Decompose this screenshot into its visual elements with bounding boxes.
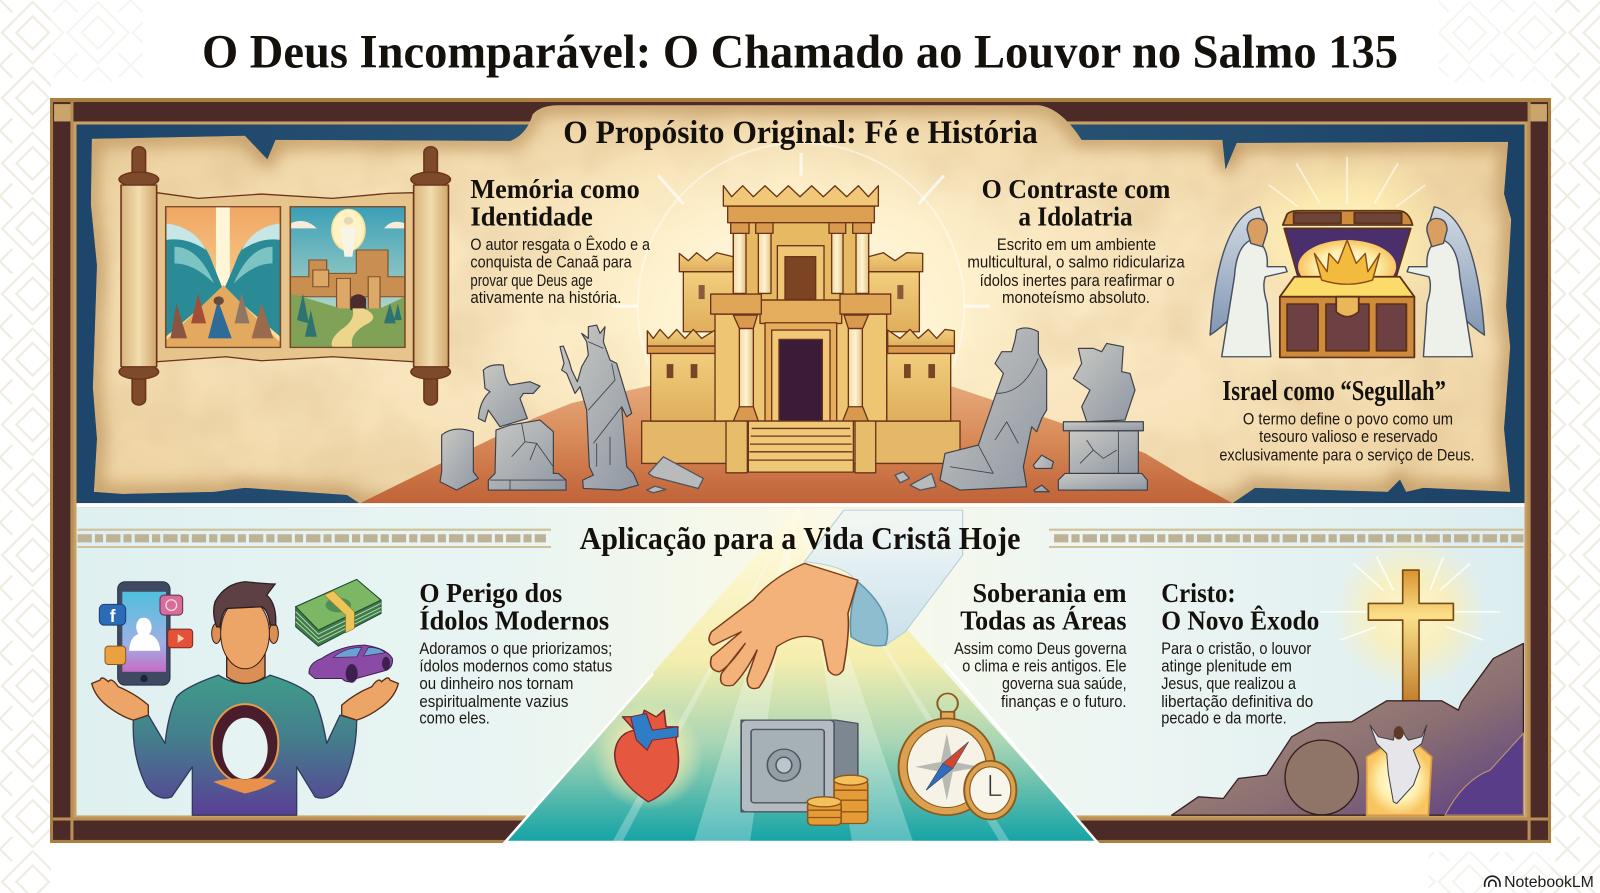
ornamental bands	[78, 530, 1523, 547]
base	[642, 421, 960, 463]
social icons	[99, 604, 126, 625]
rolled stone	[1285, 740, 1358, 815]
text block: Christ new exodus: O Novo Êxodo	[1161, 605, 1319, 636]
icon: Segullah chest and angels	[1210, 147, 1485, 357]
text block: contrast with idolatry: a Idolatria	[1018, 201, 1133, 232]
text block: Christ new exodus: libertação definitiva do	[1161, 692, 1313, 711]
scroll sheet	[157, 193, 414, 362]
rocky hill	[1172, 643, 1523, 815]
light background	[77, 503, 1524, 507]
text block: sovereignty	[954, 577, 1127, 711]
panel: application today	[77, 503, 1524, 842]
text block: Christ new exodus	[1161, 577, 1319, 728]
crown	[1314, 240, 1380, 284]
text block: contrast with idolatry: ídolos inertes para reafirmar o	[980, 271, 1174, 290]
crowned standing statue	[560, 325, 638, 490]
text block: modern idols: O Perigo dos	[419, 577, 563, 608]
text block: Segullah: tesouro valioso e reservado	[1259, 427, 1438, 446]
text block: contrast with idolatry	[967, 173, 1185, 307]
cross	[1368, 570, 1453, 702]
sunburst behind temple	[510, 112, 1092, 500]
parchment sheet	[82, 102, 1520, 505]
icon: divine hand	[709, 510, 963, 689]
head and neck	[227, 653, 265, 683]
rubble	[647, 457, 936, 493]
low wings	[647, 253, 954, 421]
text block: modern idols: Adoramos o que priorizamos;	[419, 639, 612, 658]
icon: person with empty heart and modern idols	[92, 579, 398, 815]
robed statue on rock	[940, 328, 1047, 490]
text block: memory: provar que Deus age	[470, 271, 593, 290]
text block: memory: O autor resgata o Êxodo e a	[470, 235, 651, 254]
text block: memory: conquista de Canaã para	[470, 252, 632, 271]
money stack	[296, 579, 381, 646]
lower sanctuary	[715, 314, 887, 421]
icon: cross and empty tomb	[1172, 537, 1523, 815]
text block: memory	[470, 173, 651, 307]
text block: modern idols: espiritualmente vazius	[419, 692, 568, 711]
upper sanctuary	[733, 222, 868, 300]
icon: torah scroll	[119, 147, 450, 405]
text block: sovereignty: Soberania em	[972, 577, 1127, 608]
icon: broken idols left	[440, 325, 638, 490]
stairs	[748, 421, 853, 472]
small rocks	[1033, 455, 1053, 492]
icon: safe and coins	[741, 720, 868, 825]
text block: memory: Identidade	[470, 201, 593, 232]
left angel	[1210, 207, 1287, 357]
risen Christ	[1370, 725, 1427, 803]
icon: broken idols right	[940, 328, 1147, 492]
scroll rollers	[119, 147, 450, 405]
icon: compass and watch	[899, 693, 1016, 819]
light pyramid	[505, 507, 1097, 842]
glow and rays	[1234, 147, 1460, 327]
panel: original purpose	[77, 102, 1524, 505]
section heading: Aplicação para a Vida Cristã Hoje	[580, 521, 1020, 556]
logo: NotebookLM: NotebookLM	[1504, 874, 1594, 891]
ground hill	[360, 367, 1233, 503]
icon: heart	[593, 703, 704, 810]
text block: memory: ativamente na história.	[470, 288, 621, 307]
text block: Segullah: O termo define o povo como um	[1243, 410, 1453, 429]
text block: Christ new exodus: Cristo:	[1161, 577, 1236, 608]
treasure chest	[1280, 211, 1414, 357]
text block: Segullah: Israel como “Segullah”	[1222, 376, 1446, 407]
right angel	[1407, 207, 1485, 357]
navy backdrop	[77, 125, 1524, 503]
phone	[118, 582, 170, 685]
text block: modern idols	[419, 577, 612, 728]
icon: golden temple	[642, 186, 960, 493]
text block: contrast with idolatry: monoteísmo absoluto.	[1002, 288, 1150, 307]
broken bust	[1073, 343, 1135, 422]
icon: person with empty heart and modern idols: f	[110, 606, 116, 626]
text block: Christ new exodus: atinge plenitude em	[1161, 657, 1292, 676]
text block: sovereignty: Assim como Deus governa	[954, 639, 1127, 658]
cracked column	[440, 429, 478, 490]
text block: Christ new exodus: Jesus, que realizou a	[1161, 674, 1296, 693]
tomb entrance light	[1367, 745, 1432, 815]
shirt	[133, 675, 357, 815]
text block: modern idols: como eles.	[419, 709, 490, 728]
text block: Segullah	[1219, 376, 1474, 464]
cracked pedestal	[488, 420, 566, 490]
text block: Segullah: exclusivamente para o serviço de Deus.	[1219, 445, 1474, 464]
hands	[92, 678, 148, 720]
cross glow and rays	[1320, 537, 1500, 690]
empty heart hole	[212, 704, 278, 783]
broken torso statue	[478, 365, 540, 427]
text block: contrast with idolatry: O Contraste com	[982, 173, 1170, 204]
text block: memory: Memória como	[470, 173, 640, 204]
text block: sovereignty: o clima e reis antigos. Ele	[962, 657, 1127, 676]
text block: sovereignty: Todas as Áreas	[960, 605, 1127, 636]
text block: modern idols: ou dinheiro nos tornam	[419, 674, 573, 693]
picture: parting of the sea	[166, 207, 280, 347]
picture: conquest of Canaan	[290, 207, 405, 347]
icon: logo arcs	[1485, 876, 1500, 887]
coin stacks	[807, 775, 868, 825]
text block: contrast with idolatry: Escrito em um ambiente	[997, 235, 1156, 254]
purple car	[309, 645, 392, 682]
section heading: O Propósito Original: Fé e História	[563, 115, 1038, 151]
ornate frame	[50, 98, 1551, 843]
text block: modern idols: ídolos modernos como status	[419, 657, 612, 676]
sleeve	[804, 510, 963, 646]
title: O Deus Incomparável: O Chamado ao Louvor no Salmo 135	[202, 25, 1398, 78]
text block: modern idols: Ídolos Modernos	[419, 605, 609, 636]
text block: contrast with idolatry: multicultural, o salmo ridiculariza	[967, 252, 1185, 271]
text block: Christ new exodus: pecado e da morte.	[1161, 709, 1287, 728]
text block: Christ new exodus: Para o cristão, o louvor	[1161, 639, 1312, 658]
text block: sovereignty: finanças e o futuro.	[1001, 692, 1127, 711]
text block: sovereignty: governa sua saúde,	[1002, 674, 1127, 693]
stone pedestal	[1069, 431, 1138, 473]
hand	[709, 563, 858, 689]
